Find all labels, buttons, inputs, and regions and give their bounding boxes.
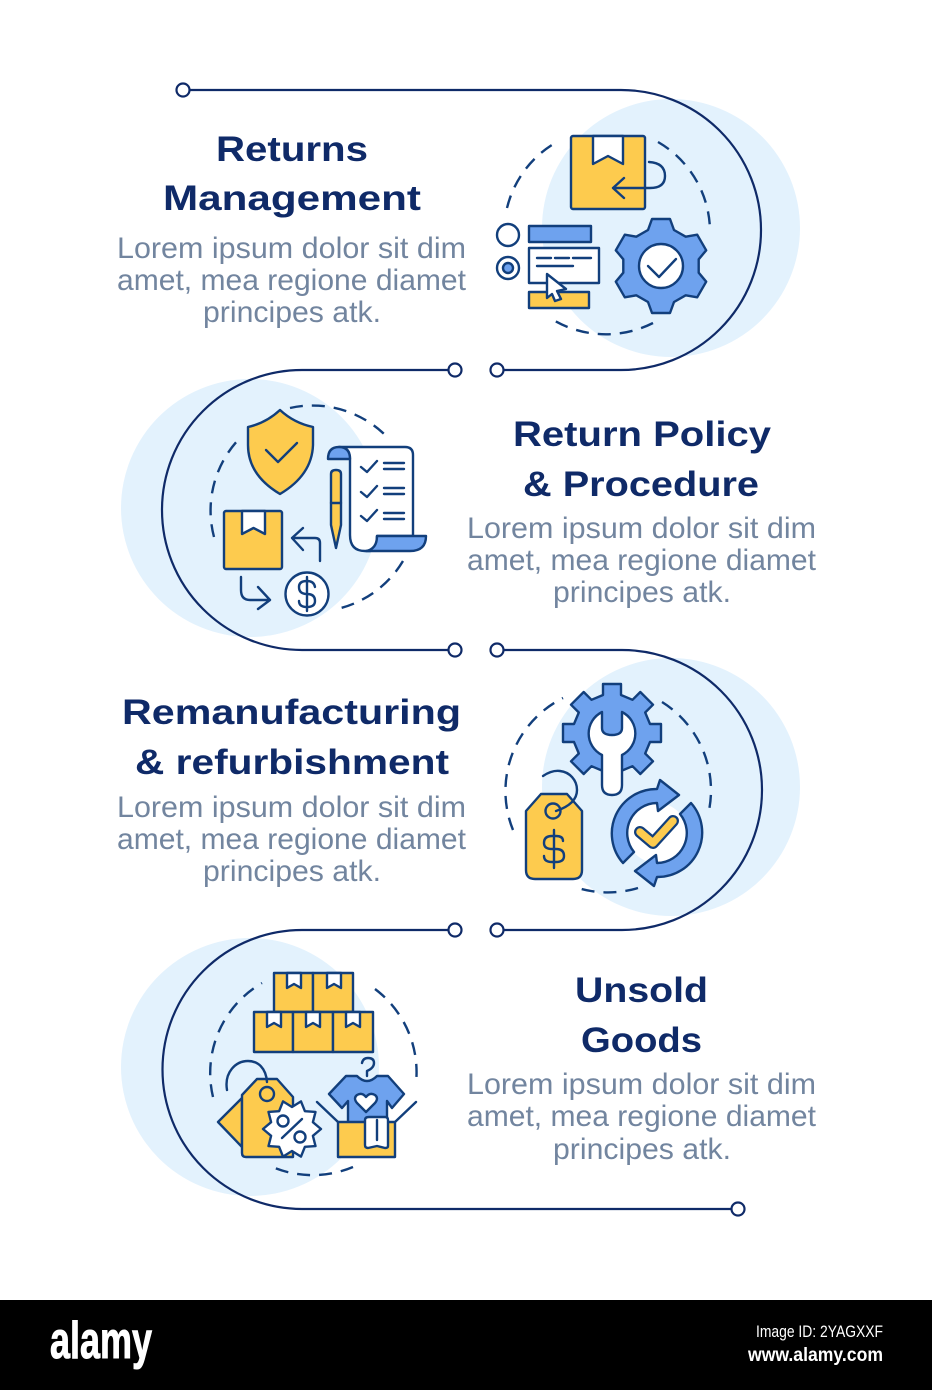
heading: returns management — [163, 130, 421, 218]
image id: Image ID: 2YAGXXF — [756, 1322, 883, 1341]
panel: returns management text — [117, 130, 466, 329]
body text 2 — [467, 512, 816, 609]
icon: unsold goods — [210, 973, 417, 1175]
icon: returns management — [497, 136, 710, 334]
body text 2: amet, mea regione diamet — [467, 544, 816, 577]
body text 1: amet, mea regione diamet — [117, 264, 466, 297]
body text 3 — [117, 791, 466, 888]
body text 3: amet, mea regione diamet — [117, 823, 466, 856]
panel: unsold goods text — [467, 971, 816, 1166]
heading: returns management: Returns — [216, 130, 368, 169]
heading: unsold goods: Goods — [581, 1021, 702, 1060]
icon: remanufacturing — [505, 684, 711, 892]
body text 1: principes atk. — [203, 296, 381, 329]
heading: remanufacturing and refurbishment: Remanufacturing — [122, 693, 461, 732]
heading: remanufacturing and refurbishment — [122, 693, 461, 782]
body text 2: Lorem ipsum dolor sit dim — [467, 512, 816, 545]
background circle 1 — [542, 99, 800, 357]
heading: remanufacturing and refurbishment: & refurbishment — [135, 743, 449, 782]
heading: return policy and procedure: Return Policy — [513, 415, 772, 454]
body text 2: principes atk. — [553, 576, 731, 609]
website: www.alamy.com — [747, 1345, 883, 1366]
heading: unsold goods: Unsold — [575, 971, 708, 1010]
body text 4 — [467, 1068, 816, 1166]
icon: return policy — [211, 406, 426, 616]
body text 3: Lorem ipsum dolor sit dim — [117, 791, 466, 824]
footer bar — [0, 1300, 932, 1390]
body text 4: amet, mea regione diamet — [467, 1100, 816, 1133]
footer logo: alamy — [50, 1312, 152, 1370]
heading: returns management: Management — [163, 179, 421, 218]
panel: remanufacturing text — [117, 693, 466, 888]
heading: unsold goods — [575, 971, 708, 1060]
background circle 2 — [121, 379, 379, 637]
body text 4: Lorem ipsum dolor sit dim — [467, 1068, 816, 1101]
panel: return policy text — [467, 415, 816, 609]
body text 1 — [117, 232, 466, 329]
background circle 3 — [542, 658, 800, 916]
body text 3: principes atk. — [203, 855, 381, 888]
connector lines — [162, 84, 762, 1216]
body text 4: principes atk. — [553, 1133, 731, 1166]
body text 1: Lorem ipsum dolor sit dim — [117, 232, 466, 265]
heading: return policy and procedure — [513, 415, 772, 504]
heading: return policy and procedure: & Procedure — [523, 465, 759, 504]
background circle 4 — [121, 938, 379, 1196]
